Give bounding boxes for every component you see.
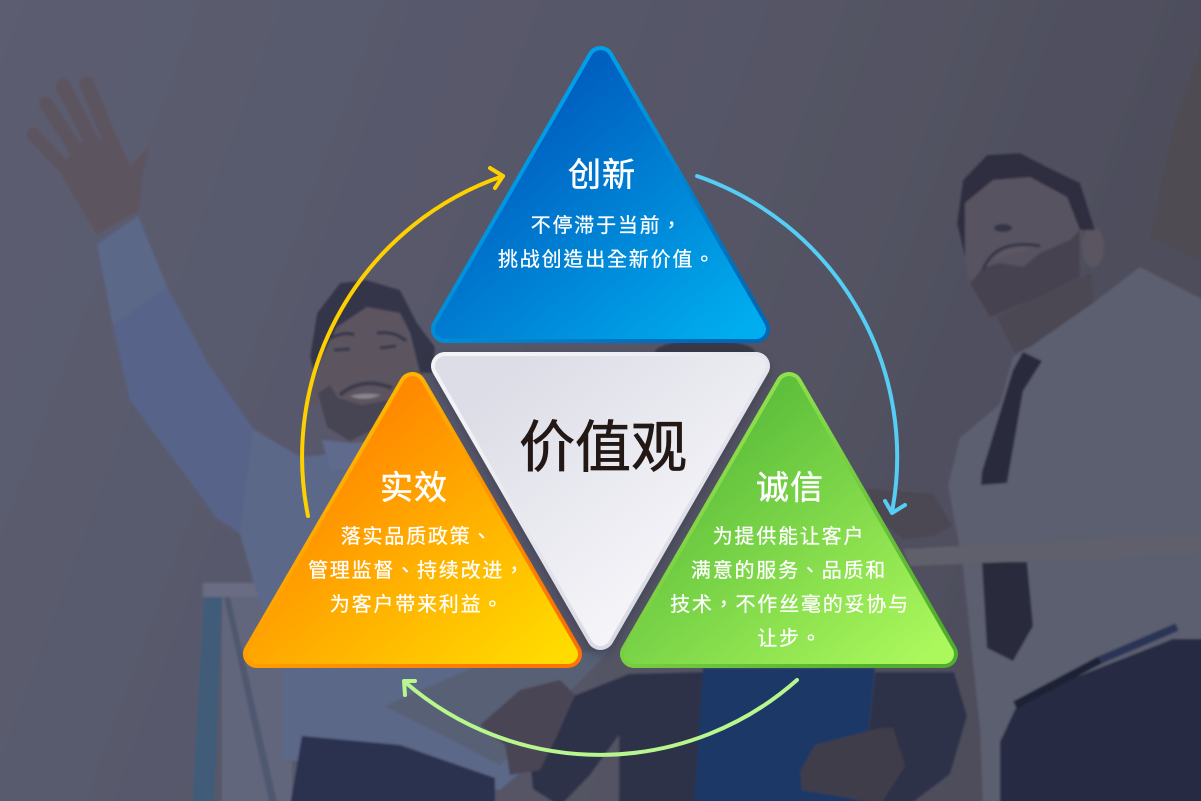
arrow: green, 诚信 to 实效 [404, 680, 797, 755]
person right: trousers [1000, 627, 1201, 801]
text block: 实效 description: 管理监督、持续改进， [308, 559, 526, 582]
text block: 创新 description: 挑战创造出全新价值。 [498, 248, 716, 271]
person centre: hand [800, 728, 905, 801]
glass rail right [903, 534, 1201, 566]
paper and hand left [385, 650, 610, 775]
text block: 诚信 description: 为提供能让客户 [713, 525, 865, 548]
person left: shirt and arm [97, 216, 535, 790]
heading: 实效: 实效 [380, 469, 448, 506]
heading: 诚信: 诚信 [756, 469, 824, 506]
glass railing left [192, 583, 293, 801]
arrow: cyan, 创新 to 诚信 [697, 176, 905, 513]
text block: 诚信 description: 满意的服务、品质和 [691, 559, 887, 582]
person left: hand [33, 84, 148, 233]
text block: 实效 description: 落实品质政策、 [341, 525, 493, 548]
heading: 创新: 创新 [568, 156, 636, 193]
person right: head [957, 153, 1104, 353]
text block: 诚信 description: 技术，不作丝毫的妥协与 [670, 593, 910, 616]
panel: 实效 triangle [257, 386, 568, 654]
person right: shirt [948, 267, 1201, 801]
text block: 实效 description: 为客户带来利益。 [330, 593, 504, 616]
text block: 创新 description: 不停滞于当前， [531, 214, 683, 237]
arrow: yellow, 实效 to 创新 [302, 168, 503, 516]
panel: 价值观 centre triangle [445, 366, 756, 642]
panel: 诚信 triangle [634, 386, 944, 654]
person right: tie [981, 352, 1042, 661]
person left: head [308, 280, 435, 470]
person centre: suit [530, 340, 967, 801]
text block: 诚信 description: 让步。 [757, 627, 823, 650]
person left: trousers [290, 736, 495, 801]
heading: 价值观: 价值观 [519, 416, 687, 479]
person centre: blue folder [694, 668, 875, 801]
person right: hand [867, 489, 952, 539]
panel: 创新 triangle [445, 60, 756, 329]
